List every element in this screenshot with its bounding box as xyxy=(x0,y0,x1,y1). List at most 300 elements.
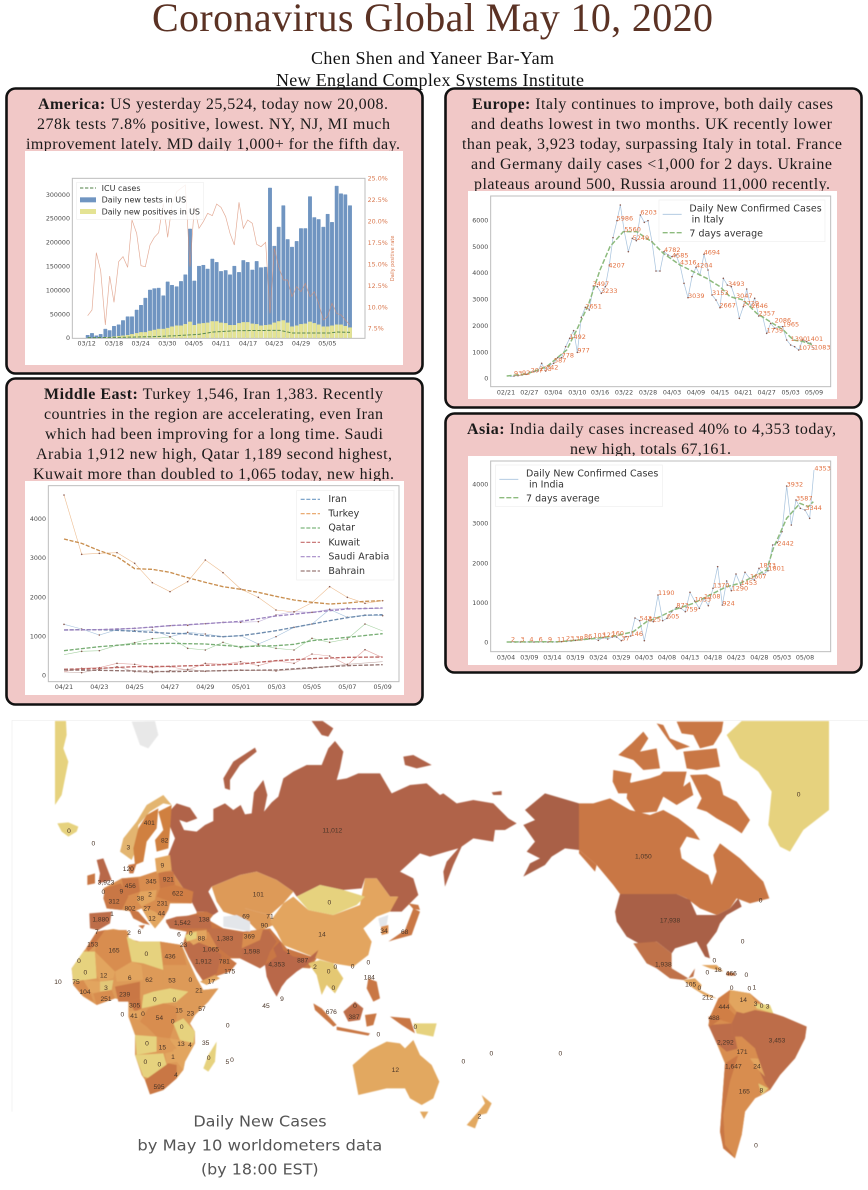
country case-count labels: 0 xyxy=(697,985,701,992)
panel: Europe xyxy=(446,88,862,408)
country case-count labels: 0 xyxy=(153,997,157,1004)
country case-count labels: 3,453 xyxy=(769,1037,786,1044)
country case-count labels xyxy=(54,792,801,1150)
country case-count labels: 0 xyxy=(333,964,337,971)
chart: Italy daily new cases: 977 xyxy=(577,346,590,354)
chart: US tests, positives and positive rate: 03/24 xyxy=(132,340,150,347)
chart: Italy daily new cases: 1739 xyxy=(767,327,783,335)
country case-count labels: 34 xyxy=(380,928,388,935)
country case-count labels: 0 xyxy=(741,938,745,945)
chart: Middle East daily cases: 05/03 xyxy=(268,684,286,691)
country case-count labels: 595 xyxy=(153,1084,165,1091)
chart: India daily new cases: 2442 xyxy=(777,539,794,547)
country case-count labels: 444 xyxy=(718,1004,730,1011)
map caption: by May 10 worldometers data xyxy=(137,1136,382,1154)
country case-count labels: 1,647 xyxy=(725,1063,742,1070)
country case-count labels: 387 xyxy=(348,1014,360,1021)
chart: Middle East daily cases xyxy=(25,481,404,695)
chart: Italy daily new cases: 1083 xyxy=(814,343,831,351)
Europe text: and Germany daily cases <1,000 for 2 days. Ukraine xyxy=(471,156,832,173)
country case-count labels: 17 xyxy=(208,978,215,985)
country case-count labels: 88 xyxy=(198,935,205,942)
country case-count labels: 1,065 xyxy=(202,946,219,953)
country case-count labels: 2,292 xyxy=(717,1039,734,1046)
country case-count labels: 239 xyxy=(119,992,131,999)
country case-count labels: 9 xyxy=(119,888,123,895)
country case-count labels: 436 xyxy=(164,953,176,960)
chart: India daily new cases: 04/18 xyxy=(704,654,722,661)
chart: Italy daily new cases: 1492 xyxy=(569,333,586,341)
chart: US tests, positives and positive rate: 200000 xyxy=(46,240,70,247)
country case-count labels: 921 xyxy=(163,876,174,883)
chart: India daily new cases: 605 xyxy=(667,612,679,620)
chart: India daily new cases: 759 xyxy=(685,606,698,614)
chart: India daily new cases: 03/24 xyxy=(589,654,607,661)
chart: Italy daily new cases: 6000 xyxy=(472,217,488,224)
chart: India daily new cases: 04/28 xyxy=(750,654,768,661)
chart: US tests, positives and positive rate: 50000 xyxy=(50,311,70,318)
chart: Italy daily new cases: 03/16 xyxy=(591,389,609,396)
chart: Italy daily new cases: 2646 xyxy=(751,302,768,310)
country case-count labels: 0 xyxy=(101,889,105,896)
country case-count labels: 75 xyxy=(72,979,80,986)
chart: US tests, positives and positive rate: 20.0% xyxy=(368,219,388,226)
chart: India daily new cases: 1607 xyxy=(750,572,767,580)
chart: Italy daily new cases: 3047 xyxy=(736,292,753,300)
country case-count labels: 105 xyxy=(685,982,697,989)
country case-count labels: 3 xyxy=(104,985,108,992)
chart: Italy daily new cases: 1390 xyxy=(791,335,807,343)
country case-count labels: 0 xyxy=(180,1024,184,1031)
chart: Italy daily new cases: 3233 xyxy=(601,287,618,295)
chart: Italy daily new cases: 5249 xyxy=(633,234,649,242)
chart: Middle East daily cases: 05/09 xyxy=(374,684,392,691)
country case-count labels: 3 xyxy=(766,1003,770,1010)
Middle East text: countries in the region are accelerating, even Iran xyxy=(44,406,383,423)
country case-count labels: 305 xyxy=(129,1003,141,1010)
country case-count labels: 0 xyxy=(91,840,95,847)
country case-count labels: 68 xyxy=(401,929,409,936)
chart: Italy daily new cases: 05/03 xyxy=(782,389,800,396)
country case-count labels: 0 xyxy=(157,1061,161,1068)
Asia text: new high, totals 67,161. xyxy=(570,441,731,458)
country case-count labels: 0 xyxy=(83,969,87,976)
chart: India daily new cases: 04/03 xyxy=(635,654,653,661)
chart: India daily new cases: 3000 xyxy=(472,521,488,528)
chart: Italy daily new cases: 02/27 xyxy=(520,389,538,396)
map caption: Daily New Cases xyxy=(193,1113,327,1131)
chart: Italy daily new cases: 4204 xyxy=(696,261,713,269)
country case-count labels: 0 xyxy=(351,963,355,970)
country case-count labels: 9 xyxy=(280,996,284,1003)
chart: India daily new cases: 3587 xyxy=(796,494,813,502)
chart: Italy daily new cases: 04/09 xyxy=(687,389,705,396)
country case-count labels: 184 xyxy=(364,974,375,981)
country case-count labels: 0 xyxy=(230,1057,234,1064)
Europe text: than peak, 3,923 today, surpassing Italy in total. France xyxy=(462,136,842,153)
chart: Italy daily new cases: 2667 xyxy=(719,302,736,310)
panel: Middle East xyxy=(6,378,422,704)
country case-count labels: 165 xyxy=(108,948,120,955)
country case-count labels: 1,938 xyxy=(655,961,672,968)
country case-count labels: 1 xyxy=(752,984,756,991)
country case-count labels: 171 xyxy=(736,1049,748,1056)
chart: India daily new cases: 04/13 xyxy=(681,654,699,661)
country case-count labels: 0 xyxy=(327,899,331,906)
country case-count labels: 14 xyxy=(740,997,747,1004)
country case-count labels: 887 xyxy=(297,957,309,964)
country case-count labels: 69 xyxy=(242,913,250,920)
chart: Middle East daily cases: 0 xyxy=(42,672,46,679)
chart: India daily new cases: 03/14 xyxy=(543,654,561,661)
country case-count labels: 622 xyxy=(172,890,184,897)
chart: Middle East daily cases: 05/07 xyxy=(338,684,356,691)
chart: India daily new cases: 924 xyxy=(722,599,735,607)
country case-count labels: 0 xyxy=(188,977,192,984)
country case-count labels: 41 xyxy=(130,1013,138,1020)
panel: Asia xyxy=(446,414,862,672)
chart: Italy daily new cases: 02/21 xyxy=(497,389,515,396)
chart: India daily new cases: 1290 xyxy=(732,585,748,593)
chart: India daily new cases: 03/19 xyxy=(566,654,584,661)
country case-count labels: 10 xyxy=(54,979,62,986)
Europe text xyxy=(462,96,842,193)
chart: Middle East daily cases: 04/21 xyxy=(55,684,73,691)
chart: US tests, positives and positive rate: 150000 xyxy=(46,264,70,271)
chart: US tests, positives and positive rate: 03/30 xyxy=(158,340,176,347)
country case-count labels: 0 xyxy=(172,997,176,1004)
chart: US tests, positives and positive rate: 12.5% xyxy=(368,283,388,290)
country case-count labels: 62 xyxy=(145,977,153,984)
chart: Italy daily new cases: 03/28 xyxy=(639,389,657,396)
chart: India daily new cases: 122 xyxy=(603,631,615,639)
country case-count labels: 1 xyxy=(286,949,290,956)
Europe text: and deaths lowest in two months. UK recently lower xyxy=(471,116,833,133)
chart: India daily new cases: 2000 xyxy=(472,560,488,567)
country case-count labels: 1,598 xyxy=(243,949,260,956)
country case-count labels: 1,880 xyxy=(92,917,109,924)
Europe text: plateaus around 500, Russia around 11,000 recently. xyxy=(474,176,830,193)
chart: US tests, positives and positive rate: Daily positive rate xyxy=(390,236,396,281)
chart: Italy daily new cases: 2000 xyxy=(472,323,488,330)
Asia text: Asia: India daily cases increased 40% to 4,353 today, xyxy=(467,421,836,438)
chart: US tests, positives and positive rate: 04/11 xyxy=(212,340,230,347)
chart: US tests, positives and positive rate: 03/18 xyxy=(105,340,123,347)
chart: US tests, positives and positive rate: 04/17 xyxy=(239,340,257,347)
Middle East text: Middle East: Turkey 1,546, Iran 1,383. Recently xyxy=(44,386,383,403)
chart: US tests, positives and positive rate: 10.0% xyxy=(368,304,388,311)
country case-count labels: 0 xyxy=(376,1031,380,1038)
map caption xyxy=(137,1113,382,1178)
country case-count labels: 212 xyxy=(702,994,714,1001)
country case-count labels: 4,353 xyxy=(268,962,285,969)
chart: US tests, positives and positive rate: 300000 xyxy=(46,192,70,199)
chart: Middle East daily cases: Turkey xyxy=(327,508,360,519)
country case-count labels: 120 xyxy=(123,866,134,873)
country case-count labels: 0 xyxy=(120,1011,124,1018)
chart: Italy daily new cases: 5986 xyxy=(617,215,633,223)
country case-count labels: 12 xyxy=(100,972,108,979)
chart: Italy daily new cases: 04/27 xyxy=(758,389,776,396)
chart: Italy daily new cases: 03/10 xyxy=(568,389,586,396)
chart: US tests, positives and positive rate: Daily new tests in US xyxy=(102,196,186,205)
country case-count labels: 0 xyxy=(744,972,748,979)
chart: Italy daily new cases xyxy=(468,191,837,399)
map: daily new cases world map xyxy=(12,720,868,1178)
country case-count labels: 2 xyxy=(313,964,317,971)
country case-count labels: 1,912 xyxy=(195,959,212,966)
chart: India daily new cases: 160 xyxy=(612,630,624,638)
chart: Italy daily new cases: 4316 xyxy=(680,259,697,267)
chart: India daily new cases: 1873 xyxy=(759,562,776,570)
America text: 278k tests 7.8% positive, lowest. NY, NJ, MI much xyxy=(37,116,390,133)
country case-count labels: 0 xyxy=(797,792,801,799)
country case-count labels: 231 xyxy=(157,901,168,908)
chart: India daily new cases: 04/23 xyxy=(727,654,745,661)
country case-count labels: 4 xyxy=(174,1072,178,1079)
country case-count labels: 0 xyxy=(353,1003,357,1010)
chart: India daily new cases: 4000 xyxy=(472,481,488,488)
chart: Middle East daily cases: Bahrain xyxy=(328,566,365,577)
chart: India daily new cases: 1453 xyxy=(741,579,757,587)
chart: Middle East daily cases: Kuwait xyxy=(328,537,360,548)
chart: Italy daily new cases: 2651 xyxy=(585,302,602,310)
chart: Middle East daily cases: Qatar xyxy=(328,523,355,534)
chart: Middle East daily cases: 3000 xyxy=(30,555,46,562)
chart: India daily new cases: 03/09 xyxy=(520,654,538,661)
chart: Italy daily new cases: 1075 xyxy=(799,344,815,352)
chart: Italy daily new cases: 6203 xyxy=(640,209,657,217)
country case-count labels: 6 xyxy=(177,932,181,939)
country case-count labels: 0 xyxy=(730,985,734,992)
country case-count labels: 0 xyxy=(754,1143,758,1150)
chart: Middle East daily cases: 1000 xyxy=(30,633,46,640)
chart: India daily new cases: 1035 xyxy=(695,595,711,603)
country case-count labels: 0 xyxy=(712,957,716,964)
chart: India daily new cases: 2 xyxy=(511,636,515,644)
chart: India daily new cases: 4 xyxy=(529,636,533,644)
country case-count labels: 0 xyxy=(413,1024,417,1031)
chart: India daily new cases: 05/08 xyxy=(796,654,814,661)
chart: India daily new cases: 03/29 xyxy=(612,654,630,661)
chart: Italy daily new cases: 4694 xyxy=(704,249,720,257)
chart: Middle East daily cases: 04/25 xyxy=(126,684,144,691)
chart: India daily new cases: 4353 xyxy=(814,464,831,472)
country case-count labels: 1 xyxy=(110,911,114,918)
chart: Italy daily new cases: 4782 xyxy=(664,246,681,254)
country case-count labels: 21 xyxy=(195,988,203,995)
country case-count labels: 6 xyxy=(128,975,132,982)
chart: US tests, positives and positive rate: 17.5% xyxy=(368,240,388,247)
country case-count labels: 0 xyxy=(189,931,193,938)
country case-count labels: 0 xyxy=(141,1011,145,1018)
chart: Italy daily new cases: 342 xyxy=(546,363,558,371)
chart: Italy daily new cases: 2357 xyxy=(759,310,775,318)
chart: US tests, positives and positive rate xyxy=(25,151,403,365)
country case-count labels: 5 xyxy=(225,1059,229,1066)
country case-count labels: 23 xyxy=(187,1010,194,1017)
country case-count labels: 153 xyxy=(87,941,99,948)
chart: Italy daily new cases: 04/21 xyxy=(734,389,752,396)
chart: Italy daily new cases: 5000 xyxy=(472,244,488,251)
country case-count labels: 3,923 xyxy=(98,880,115,887)
country case-count labels: 1,542 xyxy=(174,920,191,927)
Middle East text xyxy=(33,386,394,483)
country case-count labels: 71 xyxy=(266,913,274,920)
country case-count labels: 0 xyxy=(461,1059,465,1066)
country case-count labels: 18 xyxy=(714,967,722,974)
chart: Middle East daily cases: 04/23 xyxy=(90,684,108,691)
country case-count labels: 175 xyxy=(224,968,236,975)
country case-count labels: 0 xyxy=(171,1019,175,1026)
country case-count labels: 12 xyxy=(392,1067,399,1074)
chart: Italy daily new cases: 587 xyxy=(554,357,566,365)
country case-count labels: 24 xyxy=(753,1063,761,1070)
country case-count labels: 27 xyxy=(143,906,151,913)
Eurasia, Africa and Oceania countries xyxy=(55,721,517,1119)
chart: US tests, positives and positive rate: 05/05 xyxy=(318,340,336,347)
chart: US tests, positives and positive rate: 04/23 xyxy=(265,340,283,347)
country case-count labels: 802 xyxy=(124,906,136,913)
chart: India daily new cases: 7 days average xyxy=(526,493,600,504)
chart: India daily new cases: 873 xyxy=(676,601,689,609)
chart: Middle East daily cases: Saudi Arabia xyxy=(328,552,389,563)
country case-count labels: 11,012 xyxy=(322,828,343,835)
country case-count labels: 0 xyxy=(331,985,335,992)
Europe text: Europe: Italy continues to improve, both daily cases xyxy=(472,96,833,113)
country case-count labels: 676 xyxy=(326,1009,337,1016)
Americas countries xyxy=(467,721,829,1158)
chart: India daily new cases: 3344 xyxy=(805,504,822,512)
chart: India daily new cases: 543 xyxy=(640,615,652,623)
chart: India daily new cases: 103 xyxy=(593,632,606,640)
chart: India daily new cases: 9 xyxy=(548,636,552,644)
country case-count labels: 57 xyxy=(198,1006,206,1013)
chart: Italy daily new cases: 207 xyxy=(531,366,543,374)
chart: India daily new cases: 1108 xyxy=(704,592,721,600)
country case-count labels: 369 xyxy=(244,934,255,941)
country case-count labels: 488 xyxy=(708,1015,720,1022)
chart: Italy daily new cases: 4207 xyxy=(608,261,625,269)
chart: Italy daily new cases: 3153 xyxy=(712,289,729,297)
chart: Italy daily new cases: 04/03 xyxy=(663,389,681,396)
country case-count labels: 4 xyxy=(188,1042,192,1049)
chart: India daily new cases: 38 xyxy=(575,634,584,642)
country case-count labels: 0 xyxy=(144,951,148,958)
country case-count labels: 0 xyxy=(705,969,709,976)
chart: Italy daily new cases: 3039 xyxy=(688,292,705,300)
chart: US tests, positives and positive rate: 22.5% xyxy=(368,197,388,204)
Middle East text: Kuwait more than doubled to 1,065 today, new high. xyxy=(33,466,394,483)
chart: Italy daily new cases: 03/04 xyxy=(544,389,562,396)
chart: US tests, positives and positive rate: 04/05 xyxy=(185,340,203,347)
country case-count labels: 138 xyxy=(198,916,210,923)
country case-count labels: 2 xyxy=(477,1113,481,1120)
chart: US tests, positives and positive rate: 0 xyxy=(66,335,70,342)
chart: Italy daily new cases: 1965 xyxy=(783,320,799,328)
country case-count labels: 101 xyxy=(253,892,264,899)
country case-count labels: 0 xyxy=(226,1022,230,1029)
country case-count labels: 0 xyxy=(558,1050,562,1057)
map caption: (by 18:00 EST) xyxy=(201,1160,319,1178)
chart: Italy daily new cases: 3493 xyxy=(728,280,745,288)
chart: Middle East daily cases: 04/27 xyxy=(161,684,179,691)
chart: India daily new cases: 05/03 xyxy=(773,654,791,661)
country case-count labels: 15 xyxy=(175,1008,183,1015)
country case-count labels: 8 xyxy=(759,1088,763,1095)
country case-count labels: 90 xyxy=(261,922,268,929)
chart: India daily new cases: 86 xyxy=(584,633,592,641)
country case-count labels: 456 xyxy=(125,883,136,890)
chart: Italy daily new cases: 2086 xyxy=(775,317,791,325)
chart: Italy daily new cases: 4585 xyxy=(672,251,689,259)
America text xyxy=(26,96,400,153)
chart: India daily new cases: 3 xyxy=(520,636,524,644)
Middle East text: which had been improving for a long time. Saudi xyxy=(45,426,384,443)
chart: Italy daily new cases: 04/15 xyxy=(711,389,729,396)
chart: Middle East daily cases: 04/29 xyxy=(196,684,214,691)
chart: US tests, positives and positive rate: 100000 xyxy=(46,287,70,294)
country case-count labels: 401 xyxy=(144,820,155,827)
chart: India daily new cases: 6 xyxy=(539,636,543,644)
chart: Middle East daily cases: Iran xyxy=(328,494,347,505)
chart: Middle East daily cases: 2000 xyxy=(30,594,46,601)
country case-count labels: 13 xyxy=(177,1041,185,1048)
chart: US tests, positives and positive rate: Daily new positives in US xyxy=(102,208,200,217)
country case-count labels: 38 xyxy=(137,895,144,902)
chart: India daily new cases: 1801 xyxy=(768,565,785,573)
country case-count labels: 7 xyxy=(95,929,99,936)
chart: Italy daily new cases: 05/09 xyxy=(805,389,823,396)
country case-count labels: 104 xyxy=(79,989,91,996)
country case-count labels: 0 xyxy=(145,1040,149,1047)
Middle East text: Arabia 1,912 new high, Qatar 1,189 second highest, xyxy=(36,446,392,463)
Asia text xyxy=(467,421,836,458)
country case-count labels: 54 xyxy=(156,1015,163,1022)
country case-count labels: 2 xyxy=(148,891,152,898)
chart: India daily new cases: 3932 xyxy=(787,480,803,488)
chart: India daily new cases: 03/04 xyxy=(497,654,515,661)
country case-count labels: 1,050 xyxy=(635,853,652,860)
chart: Italy daily new cases: 3497 xyxy=(593,280,609,288)
chart: Italy daily new cases: 7 days average xyxy=(689,228,763,239)
country case-count labels: 0 xyxy=(489,1051,493,1058)
country case-count labels: 165 xyxy=(739,1088,750,1095)
America text: improvement lately. MD daily 1,000+ for the fifth day. xyxy=(26,136,400,153)
country case-count labels: 53 xyxy=(168,977,176,984)
country case-count labels: 251 xyxy=(100,996,112,1003)
chart: India daily new cases: 23 xyxy=(566,635,574,643)
country case-count labels: 17,938 xyxy=(660,918,680,925)
chart: US tests, positives and positive rate: 250000 xyxy=(46,216,70,223)
chart: Italy daily new cases: in Italy xyxy=(692,214,724,225)
chart: Italy daily new cases: 1000 xyxy=(472,349,488,356)
chart: US tests, positives and positive rate: 7.5% xyxy=(368,326,384,333)
chart: India daily new cases: 525 xyxy=(649,616,661,624)
chart: Italy daily new cases: 1401 xyxy=(807,335,823,343)
country case-count labels: 82 xyxy=(161,838,169,845)
country case-count labels: 15 xyxy=(159,1045,166,1052)
chart: US tests, positives and positive rate: 03/12 xyxy=(78,340,96,347)
chart: India daily new cases: 11 xyxy=(557,636,565,644)
country case-count labels: 44 xyxy=(158,911,165,918)
country case-count labels: 3 xyxy=(754,1001,758,1008)
chart: US tests, positives and positive rate: 25.0% xyxy=(368,176,388,183)
affiliation: New England Complex Systems Institute xyxy=(276,70,584,90)
country case-count labels: 0 xyxy=(760,1003,764,1010)
country case-count labels: 35 xyxy=(202,1040,210,1047)
chart: Italy daily new cases: 93 xyxy=(514,370,522,378)
